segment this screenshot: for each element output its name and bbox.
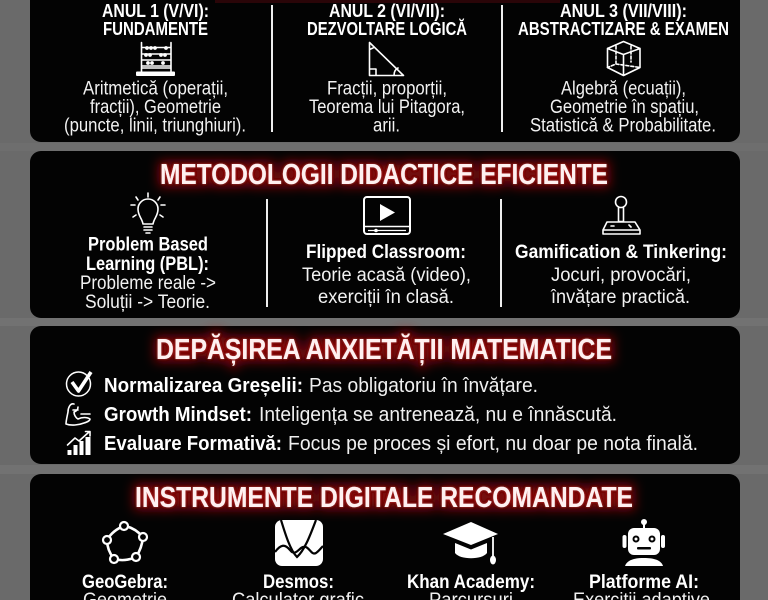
panel: overcoming math anxiety — [30, 326, 740, 464]
method: flipped classroom: Flipped Classroom: — [306, 241, 466, 263]
tool: GeoGebra — [82, 522, 168, 600]
year 3 column: Statistică & Probabilitate. — [530, 116, 716, 136]
item: growth mindset — [66, 403, 617, 426]
year 3 column: ABSTRACTIZARE & EXAMEN — [518, 19, 729, 39]
method: problem based learning: Problem Based — [88, 234, 208, 256]
year 1 column: Aritmetică (operații, — [83, 78, 228, 100]
method: gamification: Jocuri, provocări, — [551, 265, 691, 286]
icon: check mark — [66, 372, 91, 396]
method: flipped classroom: exerciții în clasă. — [318, 287, 454, 308]
year 1 column: (puncte, linii, triunghiuri). — [64, 116, 246, 136]
method: problem based learning: Probleme reale -> — [80, 273, 216, 294]
tool: Khan Academy: Khan Academy: — [407, 571, 535, 593]
panel: recommended digital tools — [30, 474, 740, 600]
icon: joystick — [603, 196, 640, 234]
method: problem based learning — [80, 193, 216, 313]
icon: right triangle — [370, 42, 404, 76]
icon: flexed arm — [66, 404, 90, 425]
tool: GeoGebra: GeoGebra: — [82, 571, 168, 593]
icon: light bulb — [131, 193, 165, 233]
icon: GeoGebra pentagon — [103, 522, 147, 563]
item: normalizing mistakes: Pas obligatoriu în învățare. — [309, 374, 538, 397]
method: problem based learning: Learning (PBL): — [86, 253, 209, 275]
heading: math anxiety: DEPĂȘIREA ANXIETĂȚII MATEMATICE — [156, 333, 612, 366]
method: flipped classroom: Teorie acasă (video), — [302, 265, 471, 286]
item: normalizing mistakes — [66, 372, 538, 397]
year 1 column: FUNDAMENTE — [103, 19, 208, 39]
year 1 column: fracții), Geometrie — [90, 97, 221, 118]
method: flipped classroom — [302, 197, 471, 308]
year 1 column: ANUL 1 (V/VI): — [102, 1, 209, 21]
year 2 column: DEZVOLTARE LOGICĂ — [307, 18, 467, 39]
year 2 column: Fracții, proporții, — [327, 78, 447, 100]
item: formative assessment — [68, 432, 698, 455]
year 3 column: Algebră (ecuații), — [561, 78, 686, 100]
icon: growth chart — [68, 432, 90, 455]
icon: video player — [364, 197, 410, 234]
icon: Desmos graph — [275, 520, 323, 566]
tool: Desmos: Desmos: — [263, 571, 334, 593]
year 2 column: arii. — [373, 116, 400, 136]
tool: Desmos — [232, 520, 364, 600]
tool: AI platforms — [573, 519, 710, 600]
year 2 column — [307, 1, 467, 136]
panel: teaching methodologies — [30, 151, 740, 318]
item: normalizing mistakes: Normalizarea Greșelii: — [104, 374, 303, 397]
method: gamification: Gamification & Tinkering: — [515, 241, 727, 263]
heading: methodologies: METODOLOGII DIDACTICE EFICIENTE — [160, 159, 608, 191]
method: gamification — [515, 196, 727, 308]
year 2 column: Teorema lui Pitagora, — [309, 97, 465, 118]
year 3 column: ANUL 3 (VII/VIII): — [560, 1, 687, 21]
tool: Khan Academy — [407, 522, 535, 600]
year 3 column — [518, 1, 729, 136]
year 3 column: Geometrie în spațiu, — [550, 97, 699, 118]
icon: graduation cap — [443, 522, 498, 564]
tool: AI platforms: Platforme AI: — [589, 571, 699, 593]
icon: abacus — [136, 42, 175, 76]
method: problem based learning: Soluții -> Teorie. — [85, 292, 210, 313]
icon: cube — [608, 42, 640, 76]
year 1 column — [64, 1, 246, 136]
item: growth mindset: Growth Mindset: — [104, 403, 252, 426]
method: gamification: învățare practică. — [550, 287, 690, 308]
panel: curriculum years — [30, 0, 740, 142]
item: formative assessment: Focus pe proces și efort, nu doar pe nota finală. — [288, 432, 698, 455]
year 2 column: ANUL 2 (VI/VII): — [329, 1, 445, 21]
item: formative assessment: Evaluare Formativă: — [104, 432, 282, 455]
icon: robot — [622, 519, 665, 566]
item: growth mindset: Inteligența se antrenează, nu e înnăscută. — [259, 403, 617, 426]
heading: digital tools: INSTRUMENTE DIGITALE RECOMANDATE — [135, 482, 633, 514]
